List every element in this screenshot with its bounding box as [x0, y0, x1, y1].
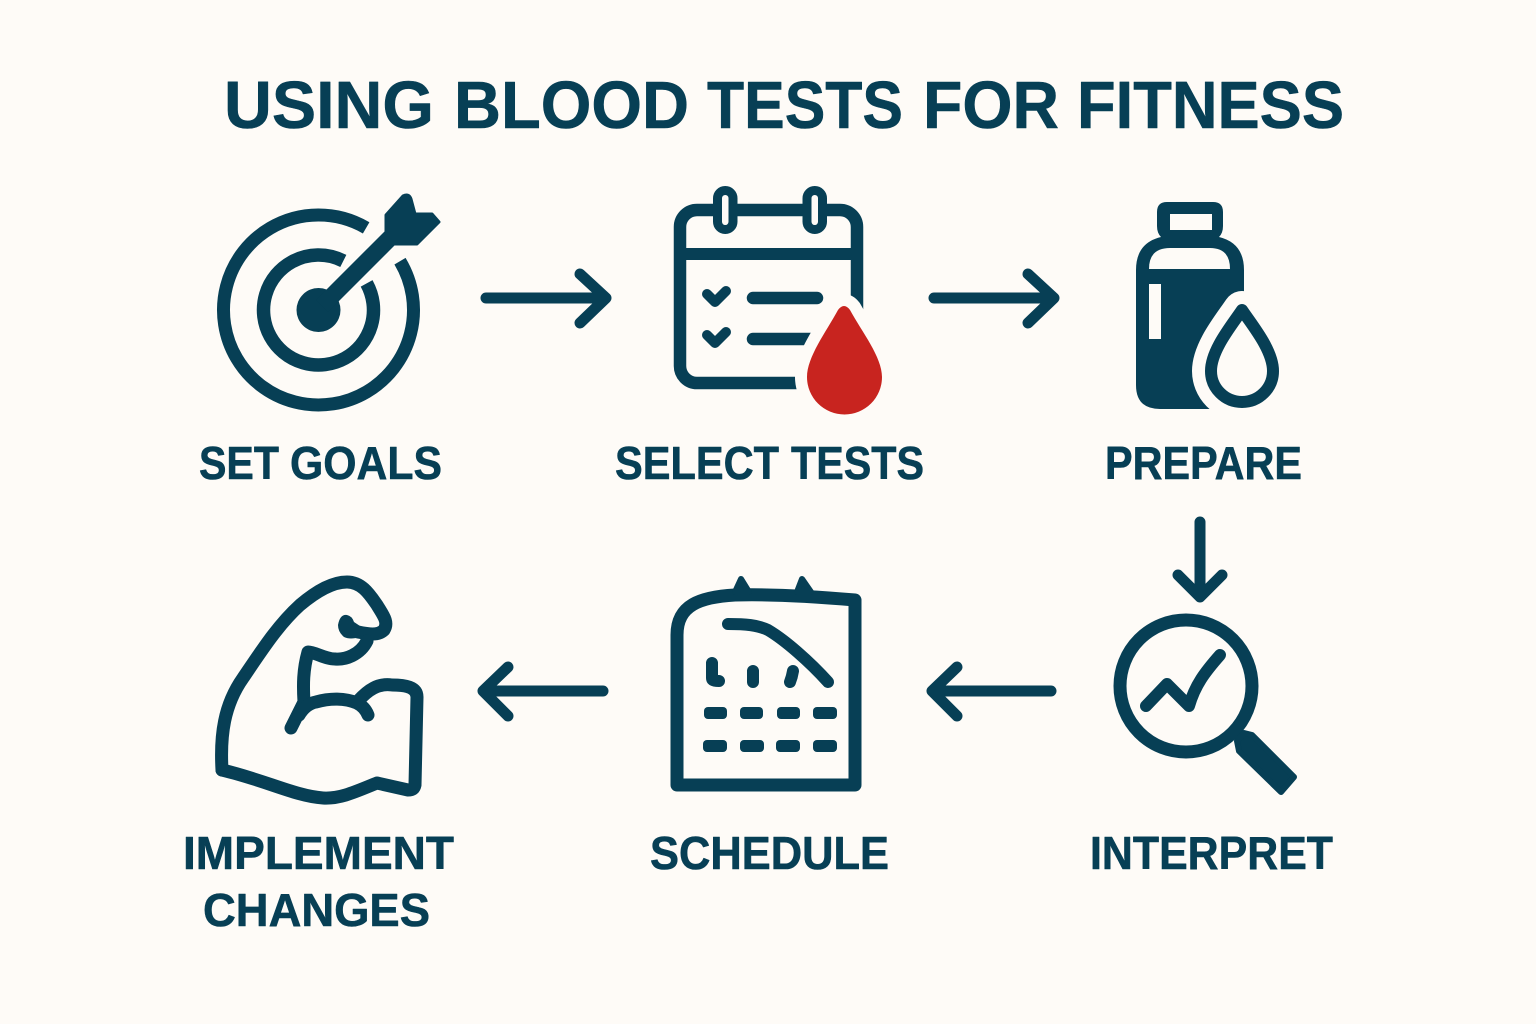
label: prepare: PREPARE	[1105, 437, 1302, 489]
title	[224, 68, 1344, 143]
icon: water drop outline	[1211, 310, 1273, 402]
title: BLOOD	[454, 68, 689, 143]
title: TESTS	[707, 68, 903, 143]
title: USING	[224, 68, 434, 143]
label: schedule: SCHEDULE	[650, 827, 889, 879]
arrow: set goals to select tests	[486, 274, 606, 323]
title: FOR	[923, 68, 1059, 143]
arrow: select tests to prepare	[934, 274, 1054, 323]
label: select tests: SELECT	[615, 437, 779, 489]
label: set goals: SET	[199, 437, 279, 489]
icon: calendar checklist with blood drop (select tests)	[680, 190, 882, 414]
label: implement changes	[183, 827, 454, 936]
label: set goals	[199, 437, 442, 489]
label: select tests: TESTS	[791, 437, 924, 489]
label: set goals: GOALS	[290, 437, 442, 489]
icon: magnifying glass with chart (interpret)	[1120, 620, 1294, 792]
label: interpret: INTERPRET	[1090, 827, 1333, 879]
label: implement changes: CHANGES	[203, 884, 430, 936]
icon: hand-drawn calendar (schedule)	[677, 579, 855, 785]
icon: flexed arm muscle (implement changes)	[222, 582, 417, 798]
title: FITNESS	[1077, 68, 1344, 143]
icon: red blood drop	[807, 306, 882, 414]
arrow: prepare to interpret	[1178, 522, 1222, 597]
label: implement changes: IMPLEMENT	[183, 827, 454, 879]
icon: bottle with water drop (prepare)	[1136, 202, 1295, 420]
arrow: schedule to implement changes	[483, 667, 603, 716]
icon: target with arrow (set goals)	[188, 180, 449, 440]
label: select tests	[615, 437, 924, 489]
arrow: interpret to schedule	[932, 667, 1051, 716]
